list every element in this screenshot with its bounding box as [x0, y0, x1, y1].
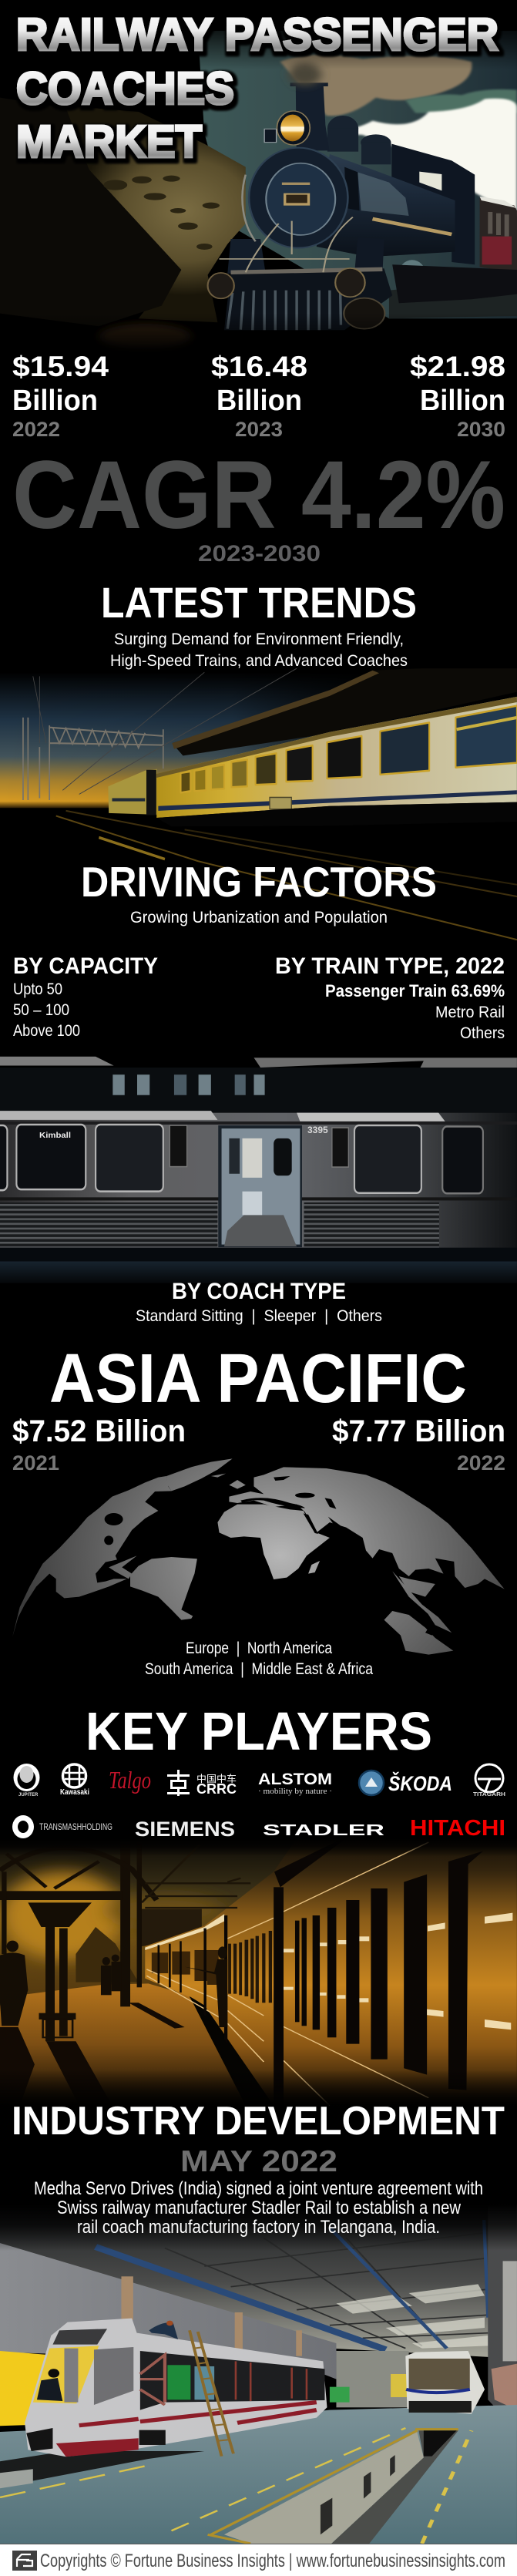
logo: Skoda: ŠKODA: [388, 1771, 452, 1795]
open door: [218, 1125, 302, 1247]
logo: Titagarh: [473, 1764, 505, 1797]
logo: CRRC: [167, 1770, 237, 1797]
platform floor: [0, 1248, 517, 1283]
other regions list: [145, 1639, 373, 1678]
segment: by capacity: BY CAPACITY: [13, 953, 158, 979]
stat: 2022 regional value: [332, 1414, 505, 1475]
top fade: [185, 0, 517, 69]
other regions list: South America | Middle East & Africa: [145, 1660, 373, 1678]
logo: CRRC: 中国中车: [196, 1771, 237, 1785]
title: [16, 9, 499, 167]
icon: Fortune Business Insights logo: [12, 2551, 37, 2571]
stat: 2021 regional value: 2021: [12, 1451, 59, 1475]
blue roof beams: [96, 2220, 488, 2349]
stat: 2022 regional value: $7.77 Billion: [332, 1414, 505, 1448]
logo: Kawasaki: Kawasaki: [60, 1788, 89, 1797]
locomotive: [208, 63, 517, 330]
CAGR period: 2023-2030: [198, 541, 321, 567]
title: MARKET: [16, 116, 202, 167]
stat: 2022 market size: Billion: [12, 385, 98, 417]
stat: 2022 market size: $15.94: [12, 351, 109, 382]
silhouettes of canopy and people: [0, 1838, 250, 2041]
passenger coach: [156, 697, 517, 826]
industry development text: [34, 2178, 483, 2238]
tracks: [56, 811, 517, 940]
development date: MAY 2022: [180, 2145, 337, 2178]
shadow under coach: [190, 1996, 267, 2095]
background building: [142, 1909, 202, 1946]
segment: by train type: Passenger Train 63.69%: [325, 981, 505, 1000]
logo: Jupiter: JUPITER: [18, 1793, 39, 1797]
industry development text: rail coach manufacturing factory in Telangana, India.: [77, 2217, 440, 2238]
panel: platform at sunset photo: [0, 1838, 517, 2106]
logo: Alstom: ALSTOM: [258, 1771, 332, 1788]
panel: coach factory photo: [0, 2204, 517, 2544]
latest trends description: [110, 631, 408, 670]
train windows: [0, 1125, 483, 1193]
station ceiling: [0, 1057, 517, 1113]
panel: hero locomotive photo: [0, 31, 517, 355]
footer: [0, 2544, 517, 2576]
logo: Talgo: Talgo: [109, 1766, 151, 1794]
coach highlights: [145, 1913, 512, 2030]
logo: Skoda: [359, 1771, 452, 1795]
far coach windows: [152, 1950, 219, 1985]
coach windows: [228, 1851, 483, 2090]
inland seas: [104, 1476, 435, 1636]
segment: by train type: BY TRAIN TYPE, 2022: [275, 953, 505, 979]
inspection pit: [208, 2430, 458, 2544]
ladder: [190, 2330, 233, 2457]
segment: by train type: Others: [460, 1024, 505, 1042]
other regions list: Europe | North America: [186, 1639, 332, 1657]
latest trends description: High-Speed Trains, and Advanced Coaches: [110, 652, 408, 670]
heading: key players: KEY PLAYERS: [86, 1701, 432, 1761]
stat: 2022 market size: [12, 351, 109, 441]
locomotive: [108, 769, 157, 815]
logo: Hitachi: HITACHI: [410, 1816, 505, 1841]
world globe map: [12, 1458, 505, 1655]
stat: 2021 regional value: $7.52 Billion: [12, 1414, 186, 1448]
stat: 2030 market size: [410, 351, 505, 441]
rear bus: [405, 2351, 485, 2414]
logo: Transmashholding: TRANSMASHHOLDING: [39, 1821, 112, 1832]
yellow wall: [0, 2351, 45, 2426]
logo: Alstom: · mobility by nature ·: [258, 1787, 332, 1796]
latest trends description: Surging Demand for Environment Friendly,: [114, 631, 404, 648]
segment: by capacity: 50 – 100: [13, 1001, 69, 1019]
panel: metro train photo: [0, 1057, 517, 1283]
far hall: [336, 2351, 409, 2407]
overhead gantry: [23, 668, 297, 800]
dusk sky: [0, 672, 517, 808]
segment: by capacity: Above 100: [13, 1022, 80, 1040]
panel: company logos: [12, 1764, 505, 1841]
destination sign: Kimball: [39, 1132, 71, 1140]
segment: by train type: Metro Rail: [435, 1004, 505, 1021]
logo: Transmashholding: [12, 1815, 112, 1838]
heading: latest trends: LATEST TRENDS: [101, 578, 417, 627]
panel: latest trends photo: [0, 664, 517, 940]
bottom fade: [99, 318, 384, 351]
logo: Jupiter: [14, 1764, 40, 1797]
segment: by coach type: Standard Sitting | Sleeper | Others: [136, 1307, 382, 1325]
platform paving: [0, 1983, 246, 2106]
coach side: [145, 1838, 517, 2106]
stat: 2023 market size: $16.48: [211, 351, 307, 382]
logo: Siemens: SIEMENS: [135, 1818, 235, 1841]
long platform shadows: [0, 2003, 185, 2092]
right wall: [488, 2217, 517, 2406]
segment: by coach type: [136, 1279, 382, 1325]
tram under construction: [25, 2319, 327, 2457]
hillside: [0, 98, 246, 349]
floor markings: [0, 2428, 472, 2544]
sky and clouds: [198, 31, 517, 318]
train body: [0, 1111, 517, 1263]
top fade: [0, 2204, 517, 2251]
stat: 2030 market size: Billion: [420, 385, 505, 417]
segment: by capacity: [13, 953, 158, 1040]
logo: Stadler: STADLER: [263, 1822, 385, 1839]
stat: 2030 market size: 2030: [457, 418, 505, 441]
logo: CRRC: CRRC: [196, 1781, 237, 1797]
driving factors description: Growing Urbanization and Population: [130, 909, 388, 926]
heading: industry development: INDUSTRY DEVELOPMENT: [12, 2099, 505, 2144]
stat: 2021 regional value: [12, 1414, 186, 1475]
dusk background: [0, 1848, 290, 2006]
factory ceiling: [0, 2220, 488, 2357]
car number: 3395: [307, 1125, 328, 1135]
title: COACHES: [16, 63, 234, 114]
logo: Titagarh: TITAGARH: [473, 1792, 505, 1797]
shop floor: [0, 2405, 517, 2544]
heading: asia pacific: ASIA PACIFIC: [49, 1340, 467, 1417]
left curtain wall: [0, 2243, 336, 2379]
stat: 2022 regional value: 2022: [457, 1451, 505, 1475]
stat: 2030 market size: $21.98: [410, 351, 505, 382]
workers: [37, 2321, 178, 2401]
stat: 2023 market size: [211, 351, 307, 441]
logo: Kawasaki: [60, 1764, 89, 1797]
title: RAILWAY PASSENGER: [16, 9, 499, 60]
stat: 2023 market size: Billion: [217, 385, 302, 417]
segment: by coach type: BY COACH TYPE: [172, 1279, 346, 1304]
heading: driving factors: DRIVING FACTORS: [81, 858, 437, 906]
ceiling lights: [165, 2233, 488, 2349]
segment: by capacity: Upto 50: [13, 980, 62, 998]
stat: 2023 market size: 2023: [235, 418, 283, 441]
segment: by train type: [275, 953, 505, 1042]
stat: 2022 market size: 2022: [12, 418, 60, 441]
platform canopy: [172, 664, 517, 755]
logo: Alstom: [258, 1771, 332, 1796]
